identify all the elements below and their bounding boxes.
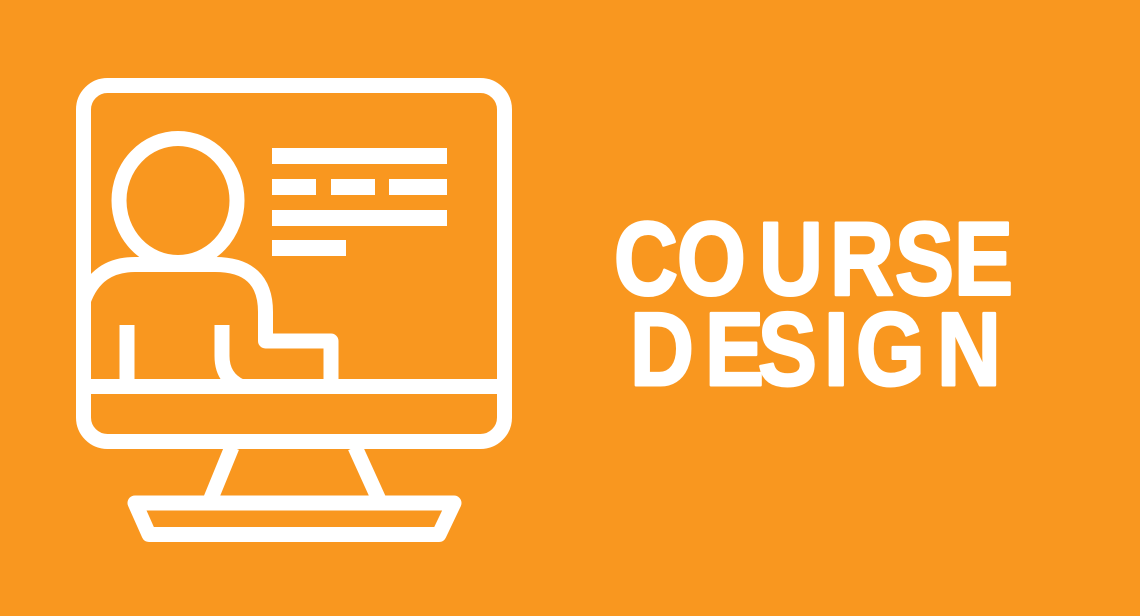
monitor screen baseline — [84, 379, 505, 394]
title line 1: COURSE — [614, 202, 1013, 317]
person head — [119, 138, 237, 262]
title line 2: DESIGN — [630, 292, 1001, 408]
person body — [83, 264, 331, 386]
monitor base — [135, 503, 454, 534]
title: course design — [614, 202, 1013, 408]
text lines on screen — [272, 148, 447, 256]
monitor frame — [84, 86, 504, 442]
monitor stand — [210, 447, 380, 502]
icon: computer monitor with instructor — [83, 86, 505, 534]
